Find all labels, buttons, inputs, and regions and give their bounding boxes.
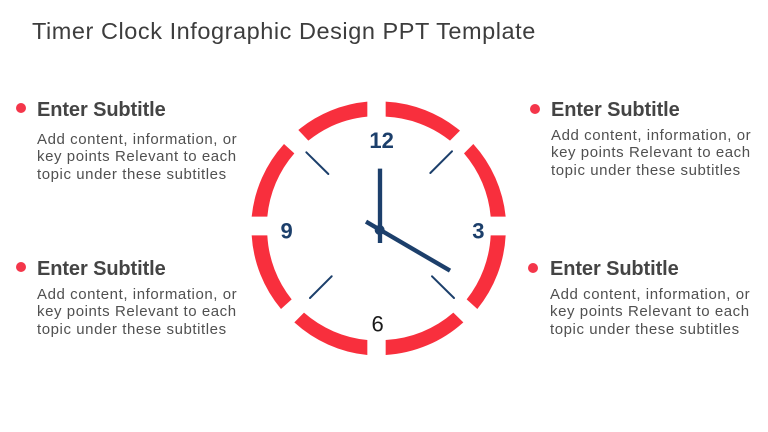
bullet [16, 262, 26, 272]
panel: bottom left [16, 258, 237, 338]
clock numerals: 3 [472, 218, 484, 243]
clock numerals: 6 [372, 312, 384, 337]
bullet [528, 263, 538, 273]
body text [37, 131, 237, 183]
bullet [530, 104, 540, 114]
body text: key points Relevant to each [37, 303, 237, 320]
title: Timer Clock Infographic Design PPT Template [32, 18, 536, 44]
subtitle: Enter Subtitle [37, 258, 166, 280]
body text: topic under these subtitles [37, 321, 227, 338]
body text: topic under these subtitles [37, 166, 227, 183]
subtitle: Enter Subtitle [550, 258, 679, 280]
body text: key points Relevant to each [550, 303, 750, 320]
clock numerals [281, 128, 484, 337]
bullet [16, 103, 26, 113]
body text: key points Relevant to each [551, 144, 751, 161]
body text: topic under these subtitles [550, 321, 740, 338]
body text: key points Relevant to each [37, 148, 237, 165]
body text [550, 286, 750, 338]
body text: Add content, information, or [37, 131, 237, 148]
tick marks [306, 151, 454, 298]
panel: top right [530, 99, 751, 179]
body text: topic under these subtitles [551, 162, 741, 179]
body text [37, 286, 237, 338]
clock ring segments [252, 102, 506, 355]
body text: Add content, information, or [550, 286, 750, 303]
panel: top left [16, 99, 237, 183]
clock numerals: 9 [281, 218, 293, 243]
clock hands [366, 169, 450, 271]
body text [551, 127, 751, 179]
subtitle: Enter Subtitle [551, 99, 680, 121]
clock numerals: 12 [369, 128, 394, 153]
subtitle: Enter Subtitle [37, 99, 166, 121]
body text: Add content, information, or [551, 127, 751, 144]
body text: Add content, information, or [37, 286, 237, 303]
panel: bottom right [528, 258, 750, 338]
clock [252, 102, 506, 355]
